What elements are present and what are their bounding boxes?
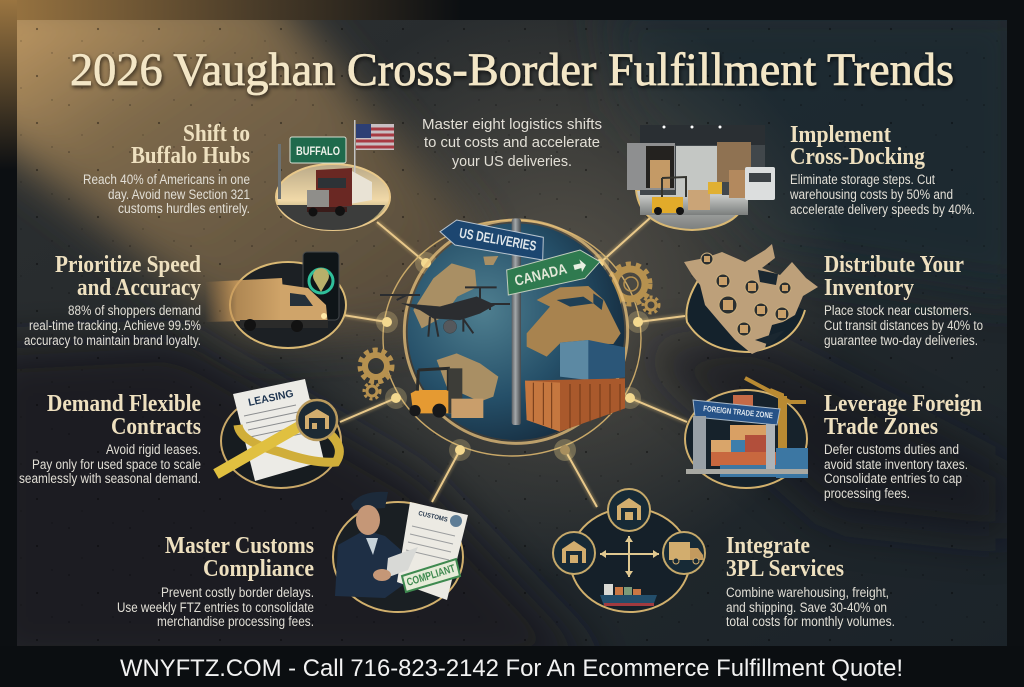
heading: Demand Flexible bbox=[47, 391, 201, 417]
body text bbox=[117, 585, 314, 629]
body text: Place stock near customers. bbox=[824, 303, 972, 318]
body text: total costs for monthly volumes. bbox=[726, 614, 895, 629]
forklift and crate bbox=[409, 368, 483, 418]
body text: avoid state inventory taxes. bbox=[824, 457, 968, 472]
illustration: truck under Buffalo sign with US flag: BUFFALO bbox=[296, 146, 340, 158]
heading: Inventory bbox=[824, 275, 914, 301]
body text bbox=[824, 303, 983, 348]
body text: real-time tracking. Achieve 99.5% bbox=[29, 318, 201, 333]
illustration: foreign trade zone gate, crane and containers: FOREIGN TRADE ZONE bbox=[703, 404, 774, 420]
body text: accuracy to maintain brand loyalty. bbox=[24, 333, 201, 348]
icon: gears right of globe bbox=[610, 264, 659, 313]
signpost pole bbox=[512, 218, 521, 425]
heading bbox=[131, 121, 250, 169]
heading: Cross-Docking bbox=[790, 144, 925, 170]
heading: Distribute Your bbox=[824, 252, 964, 278]
heading: Shift to bbox=[183, 121, 250, 147]
body text: Eliminate storage steps. Cut bbox=[790, 172, 935, 187]
icon: gears left of globe bbox=[360, 350, 392, 399]
panel: Leverage Foreign Trade Zones bbox=[685, 378, 982, 501]
panel: Master Customs Compliance bbox=[117, 492, 468, 629]
body text: Consolidate entries to cap bbox=[824, 471, 962, 486]
heading bbox=[726, 533, 844, 582]
globe glow ring bbox=[404, 220, 628, 443]
sign: Canada bbox=[507, 250, 600, 295]
panel: Integrate 3PL Services bbox=[553, 489, 895, 629]
sign: US Deliveries: US DELIVERIES bbox=[458, 225, 538, 254]
intro text: your US deliveries. bbox=[452, 153, 572, 170]
body text: day. Avoid new Section 321 bbox=[108, 187, 250, 202]
heading: and Accuracy bbox=[77, 275, 201, 301]
body text: processing fees. bbox=[824, 486, 910, 501]
heading: Leverage Foreign bbox=[824, 391, 982, 417]
body text bbox=[19, 442, 201, 486]
central illustration: globe with signpost, drone, forklift and containers bbox=[380, 218, 628, 443]
illustration: lease contract with measuring tape bbox=[216, 379, 341, 488]
body text: Use weekly FTZ entries to consolidate bbox=[117, 600, 314, 615]
panel: Implement Cross-Docking bbox=[627, 122, 975, 230]
body text: accelerate delivery speeds by 40%. bbox=[790, 202, 975, 217]
body text: merchandise processing fees. bbox=[157, 614, 314, 629]
illustration: customs officer holding compliant document: COMPLIANT bbox=[405, 563, 457, 589]
heading: Contracts bbox=[111, 414, 201, 440]
body text: Combine warehousing, freight, bbox=[726, 585, 889, 600]
heading: Trade Zones bbox=[824, 414, 938, 440]
body text: guarantee two-day deliveries. bbox=[824, 333, 978, 348]
panel: Distribute Your Inventory bbox=[684, 244, 983, 354]
panel: Shift to Buffalo Hubs bbox=[83, 120, 394, 230]
body text: warehousing costs by 50% and bbox=[789, 187, 953, 202]
intro text: to cut costs and accelerate bbox=[424, 134, 600, 151]
stacked shipping containers bbox=[525, 340, 625, 432]
illustration: delivery truck and tracking phone bbox=[205, 252, 346, 348]
body text: Pay only for used space to scale bbox=[32, 457, 201, 472]
heading: Integrate bbox=[726, 533, 810, 559]
body text: and shipping. Save 30-40% on bbox=[726, 600, 887, 615]
illustration: lease contract with measuring tape: LEASING bbox=[247, 388, 295, 409]
illustration: truck under Buffalo sign with US flag bbox=[276, 120, 394, 230]
heading bbox=[824, 391, 982, 440]
body text bbox=[789, 172, 975, 217]
body text: Prevent costly border delays. bbox=[161, 585, 314, 600]
heading bbox=[165, 533, 314, 582]
body text: Avoid rigid leases. bbox=[106, 442, 201, 457]
heading bbox=[47, 391, 201, 440]
body text bbox=[83, 172, 250, 216]
globe bbox=[408, 223, 624, 440]
heading: Master Customs bbox=[165, 533, 314, 559]
illustration: customs officer holding compliant document: CUSTOMS bbox=[418, 510, 449, 524]
footer bar: WNYFTZ.COM - Call 716-823-2142 For An Ecommerce Fulfillment Quote! bbox=[120, 655, 903, 682]
illustration: North America map with inventory pins bbox=[684, 244, 818, 354]
body text: Reach 40% of Americans in one bbox=[83, 172, 250, 187]
heading bbox=[790, 122, 925, 170]
body text: Cut transit distances by 40% to bbox=[824, 318, 983, 333]
title: 2026 Vaughan Cross-Border Fulfillment Trends bbox=[70, 44, 954, 96]
heading: Compliance bbox=[203, 556, 314, 582]
sign: US Deliveries bbox=[440, 220, 543, 260]
body text: 88% of shoppers demand bbox=[68, 303, 201, 318]
body text bbox=[24, 303, 201, 348]
body text: Defer customs duties and bbox=[824, 442, 959, 457]
drone bbox=[380, 287, 510, 337]
body text: customs hurdles entirely. bbox=[118, 201, 250, 216]
illustration: cross-docking warehouse bbox=[627, 125, 775, 230]
network: gold connector lines and nodes bbox=[340, 218, 687, 507]
panel: Prioritize Speed and Accuracy bbox=[24, 252, 346, 348]
body text bbox=[726, 585, 895, 629]
intro text: Master eight logistics shifts bbox=[422, 116, 602, 133]
illustration: customs officer holding compliant document bbox=[333, 492, 468, 612]
heading: Buffalo Hubs bbox=[131, 143, 250, 169]
body text: seamlessly with seasonal demand. bbox=[19, 471, 201, 486]
sign: Canada: CANADA bbox=[513, 261, 569, 290]
heading bbox=[824, 252, 964, 301]
heading: 3PL Services bbox=[726, 556, 844, 582]
footer bar bbox=[0, 646, 1024, 687]
body text bbox=[824, 442, 968, 501]
illustration: foreign trade zone gate, crane and containers bbox=[685, 378, 808, 488]
panel: Demand Flexible Contracts bbox=[19, 379, 341, 488]
intro text bbox=[422, 116, 602, 170]
heading bbox=[55, 252, 202, 301]
heading: Implement bbox=[790, 122, 891, 148]
illustration: 3PL hub with warehouses, truck and ship bbox=[553, 489, 705, 612]
heading: Prioritize Speed bbox=[55, 252, 202, 278]
